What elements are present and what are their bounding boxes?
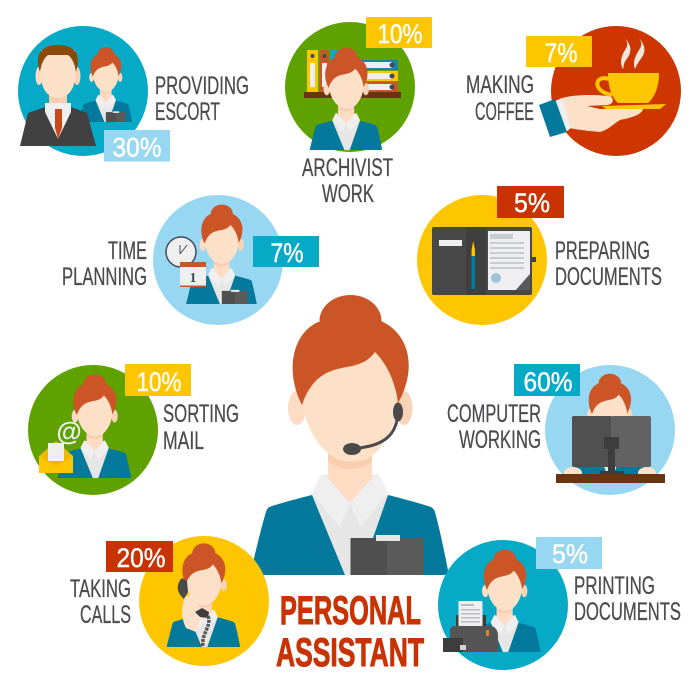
badge: 7% coffee: [526, 36, 592, 68]
badge: 10% archivist: 10%: [378, 19, 422, 49]
label: time planning: TIME: [108, 237, 147, 265]
badge: 60%: 60%: [524, 367, 572, 397]
label: making coffee: MAKING: [466, 71, 534, 99]
icon: steam: [621, 38, 644, 69]
title: personal assistant: PERSONAL: [280, 589, 421, 633]
label: preparing documents: PREPARING: [555, 237, 650, 265]
icon: at sign: @: [56, 416, 82, 446]
label: computer working: COMPUTER: [447, 400, 541, 428]
label: archivist work: ARCHIVIST: [302, 154, 393, 182]
label: making coffee: COFFEE: [475, 98, 534, 126]
icon: computer on desk: [556, 416, 665, 483]
label: printing documents: PRINTING: [574, 572, 655, 600]
icon: coffee cup on saucer: [597, 73, 666, 109]
label: making coffee: [466, 71, 534, 126]
label: sorting mail: MAIL: [163, 427, 204, 455]
icon: businessman: [20, 45, 96, 146]
label: time planning: PLANNING: [62, 263, 147, 291]
label: taking calls: CALLS: [80, 601, 131, 629]
badge: 7% time: 7%: [270, 238, 304, 268]
panel: providing escort: [18, 26, 148, 156]
badge: 20%: 20%: [116, 543, 166, 573]
panel: making coffee: [539, 26, 681, 156]
label: printing documents: [574, 572, 681, 626]
icon: calendar: 1: [190, 271, 196, 286]
badge: 5% preparing: 5%: [514, 188, 550, 218]
badge: 30%: 30%: [112, 132, 162, 162]
icon: binders and shelves: [304, 50, 401, 98]
badge: 7% time: [253, 236, 319, 268]
label: sorting mail: SORTING: [163, 400, 239, 428]
label: providing escort: [155, 72, 249, 126]
label: providing escort: ESCORT: [155, 98, 220, 126]
badge: 5% preparing: [497, 186, 564, 218]
main figure: personal assistant with headset: [250, 295, 449, 575]
badge: 10% mail: 10%: [136, 367, 182, 397]
label: computer working: WORKING: [459, 426, 541, 454]
icon: printer: [443, 601, 498, 652]
label: archivist work: WORK: [322, 180, 374, 208]
headset: [343, 402, 403, 455]
label: taking calls: [70, 575, 131, 629]
label: time planning: [62, 237, 147, 291]
panel: taking calls: [139, 536, 269, 666]
label: taking calls: TAKING: [70, 575, 131, 603]
title: personal assistant: [276, 589, 424, 675]
icon: clock: [166, 237, 196, 267]
icon: phone earpiece: [178, 578, 188, 599]
label: providing escort: PROVIDING: [155, 72, 249, 100]
icon: envelope with letter: [39, 441, 73, 473]
panel: printing documents: [438, 540, 568, 670]
panel: preparing documents: [417, 195, 547, 325]
icon: hand and phone cord: [182, 594, 209, 646]
label: preparing documents: [555, 237, 662, 291]
title: personal assistant: ASSISTANT: [276, 631, 424, 675]
badge: 7% coffee: 7%: [544, 38, 578, 68]
panel: computer working: [545, 365, 675, 495]
label: archivist work: [302, 154, 393, 208]
badge: 5% printing: 5%: [552, 539, 588, 569]
panel: time planning: [153, 195, 283, 325]
badge: 5% printing: [536, 537, 602, 569]
label: computer working: [447, 400, 541, 454]
icon: portfolio with document and pen: [432, 227, 536, 295]
panel: sorting mail: [28, 365, 158, 495]
label: sorting mail: [163, 400, 239, 455]
icon: hand and cuff: [539, 95, 643, 137]
panel: archivist work: [285, 22, 415, 152]
